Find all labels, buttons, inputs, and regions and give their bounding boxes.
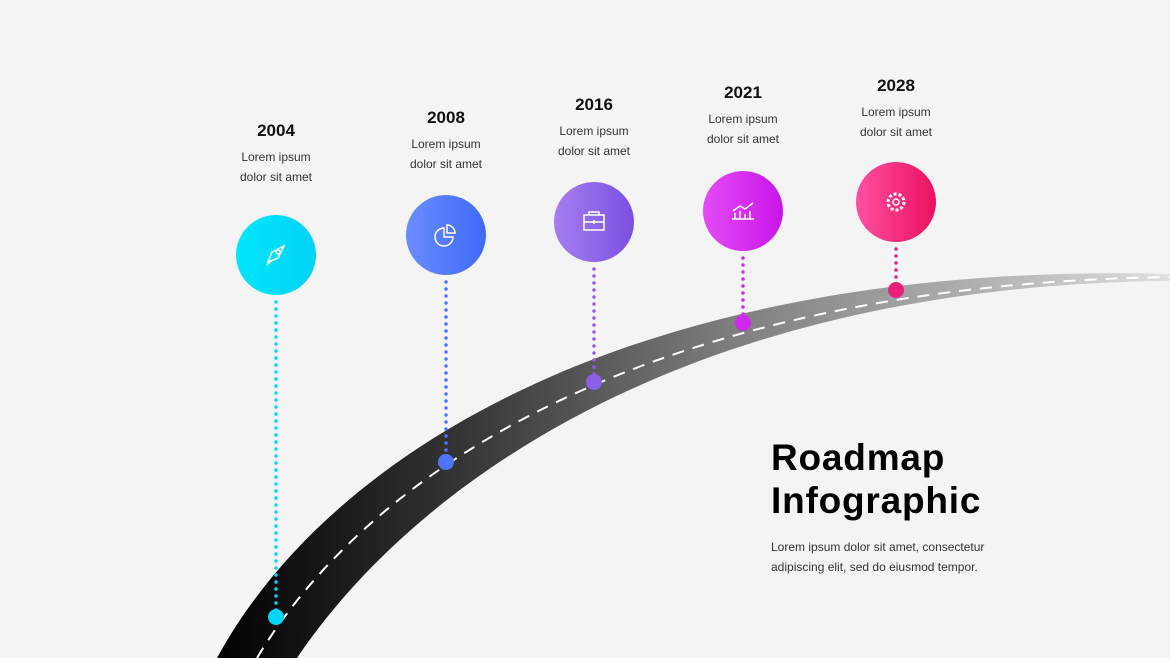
label 2008: Lorem ipsum: [411, 137, 481, 151]
title: Roadmap: [771, 437, 945, 478]
label 2021: 2021: [724, 83, 762, 102]
label 2016: dolor sit amet: [558, 144, 630, 158]
label 2028: 2028: [877, 76, 915, 95]
label 2004: dolor sit amet: [240, 170, 312, 184]
description: Lorem ipsum dolor sit amet, consectetur: [771, 540, 984, 554]
label 2028: [860, 76, 932, 139]
label 2016: Lorem ipsum: [559, 124, 629, 138]
label 2028: Lorem ipsum: [861, 105, 931, 119]
label 2021: [707, 83, 779, 146]
label 2004: 2004: [257, 121, 295, 140]
connectors: [276, 249, 896, 612]
label 2008: dolor sit amet: [410, 157, 482, 171]
title: [771, 437, 981, 521]
label 2016: 2016: [575, 95, 613, 114]
label 2028: dolor sit amet: [860, 125, 932, 139]
label 2021: dolor sit amet: [707, 132, 779, 146]
description: adipiscing elit, sed do eiusmod tempor.: [771, 560, 978, 574]
label 2004: Lorem ipsum: [241, 150, 311, 164]
label 2016: [558, 95, 630, 158]
icon circles: [236, 162, 936, 295]
label 2021: Lorem ipsum: [708, 112, 778, 126]
label 2008: 2008: [427, 108, 465, 127]
road dots: [268, 282, 904, 625]
title: Infographic: [771, 480, 981, 521]
label 2008: [410, 108, 482, 171]
road: [217, 273, 1170, 658]
description: [771, 540, 984, 574]
label 2004: [240, 121, 312, 184]
